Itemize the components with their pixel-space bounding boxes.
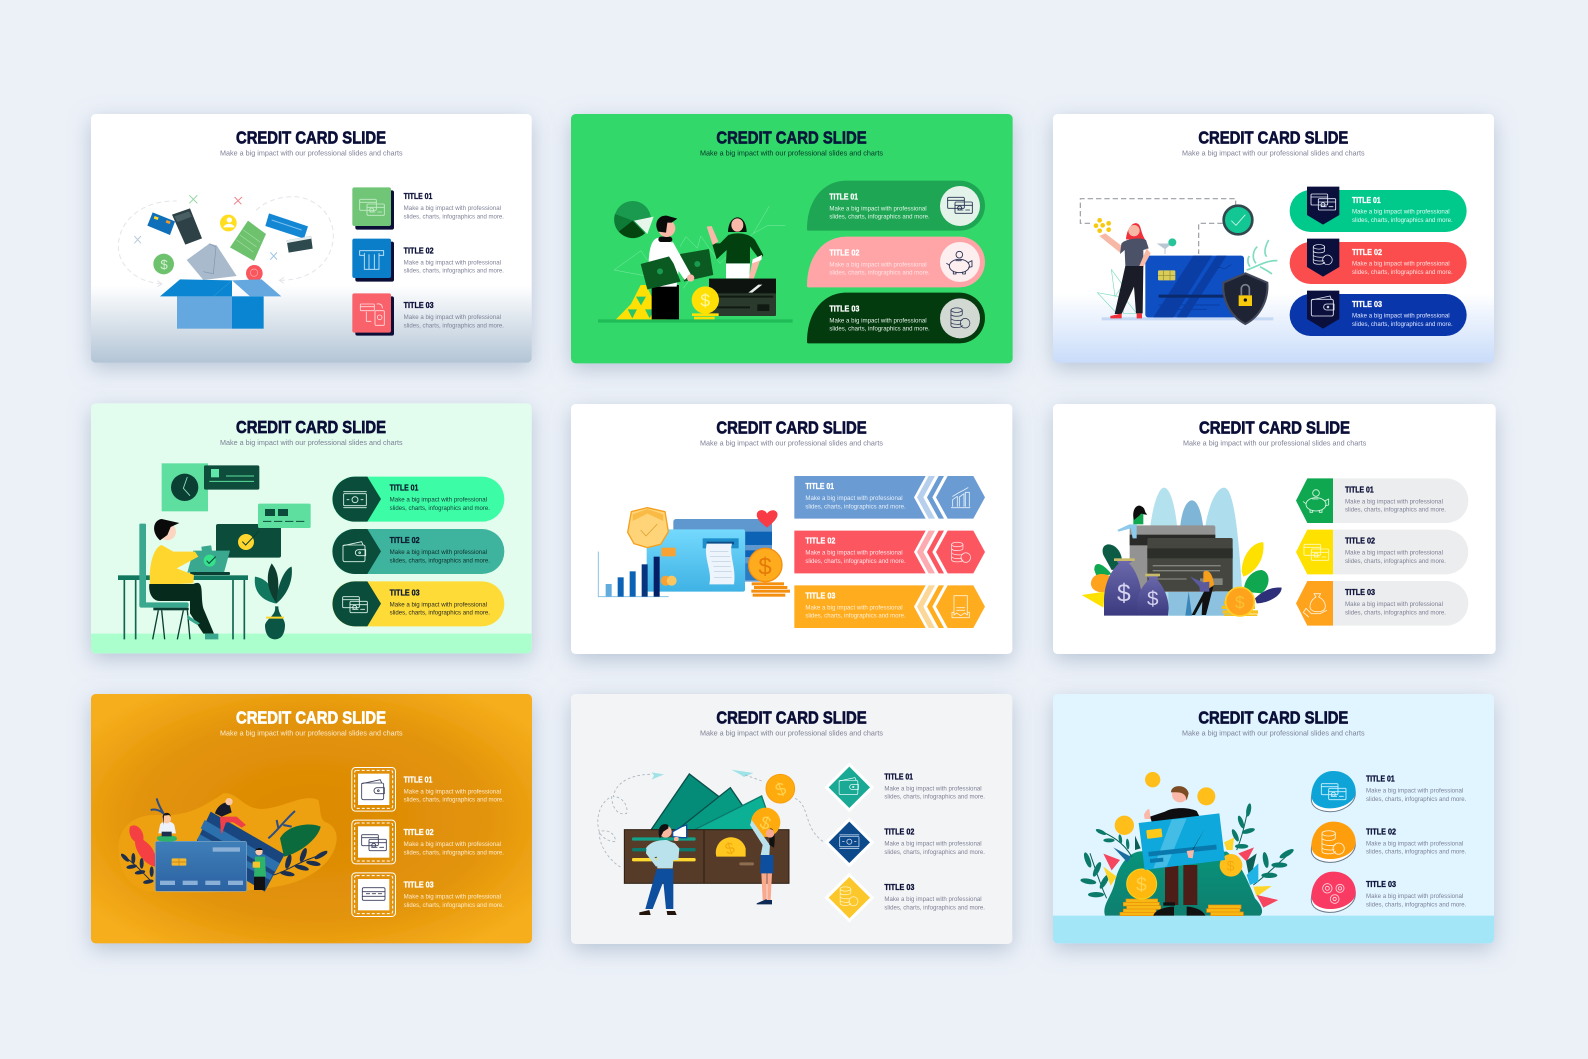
slide 4 title: CREDIT CARD SLIDE bbox=[236, 417, 386, 437]
slide 2 background bbox=[571, 114, 1013, 363]
item 3: text: slides, charts, infographics and more. bbox=[1366, 902, 1467, 908]
item 2: text: TITLE 02 bbox=[884, 828, 915, 837]
item 3: text: Make a big impact with professional bbox=[1366, 894, 1463, 900]
item 3: pill: TITLE 03 bbox=[829, 305, 860, 314]
illustration: woman, card, shield bbox=[1080, 199, 1277, 324]
item 3: pink blob icon bbox=[1311, 872, 1356, 912]
item 1: grey pill with green hexagon: slides, charts, infographics and more. bbox=[1345, 508, 1446, 514]
item 2: grey pill with yellow hexagon: TITLE 02 bbox=[1345, 537, 1375, 546]
slide 7: orange gradient with cards bbox=[91, 694, 532, 943]
illustration: open box with flying items: $ bbox=[160, 257, 168, 272]
item 2: navy diamond icon bbox=[824, 817, 874, 867]
item 2: text: Make a big impact with professional bbox=[404, 842, 501, 848]
item 1: text: TITLE 01 bbox=[884, 772, 913, 781]
item 2: text bbox=[404, 246, 504, 275]
slide 5 subtitle: Make a big impact with our professional slides and charts bbox=[700, 439, 883, 448]
item 3: orange arrow: TITLE 03 bbox=[805, 591, 836, 600]
item 2: text: TITLE 02 bbox=[404, 246, 434, 255]
item 3 icon bbox=[940, 298, 980, 338]
item 3 arrow with icon bbox=[332, 581, 381, 626]
item 1: text bbox=[884, 772, 985, 801]
item 1: green pill: TITLE 01 bbox=[1352, 196, 1381, 205]
item 1: green pill: Make a big impact with professional bbox=[1352, 210, 1450, 216]
slide 9 background bbox=[1053, 694, 1494, 943]
item 1: text bbox=[404, 192, 504, 220]
item 3 icon bbox=[952, 596, 969, 618]
slide 9 title: CREDIT CARD SLIDE bbox=[1198, 708, 1348, 728]
item 2: text: slides, charts, infographics and more. bbox=[884, 850, 985, 856]
item 2: text: slides, charts, infographics and more. bbox=[1366, 850, 1467, 856]
item 2: text: Make a big impact with professional bbox=[1366, 841, 1463, 847]
item 2: red pill: slides, charts, infographics and more. bbox=[1352, 270, 1453, 276]
slide 3: secure card with woman bbox=[1053, 114, 1494, 363]
item 1: blue arrow bbox=[794, 476, 985, 519]
illustration: card, receipt, bars and coin: $ bbox=[758, 553, 772, 580]
item 1: text bbox=[404, 775, 504, 804]
slide 2 title: CREDIT CARD SLIDE bbox=[716, 128, 867, 148]
item 3: red icon bbox=[352, 293, 394, 336]
item 2: text bbox=[884, 828, 985, 856]
item 3: pill bbox=[807, 293, 985, 343]
item 1: grey pill with green hexagon: Make a big impact with professional bbox=[1345, 499, 1443, 505]
illustration: wallet, banknotes, people bbox=[598, 770, 823, 915]
item 1: green pill: TITLE 01 bbox=[390, 484, 419, 493]
item 3: yellow diamond icon bbox=[824, 873, 874, 923]
item 3: blue pill bbox=[1290, 291, 1467, 336]
item 1: green pill: slides, charts, infographics and more. bbox=[1352, 218, 1453, 224]
slide 7 title: CREDIT CARD SLIDE bbox=[236, 708, 386, 728]
item 2: text bbox=[404, 828, 504, 856]
item 1: grey pill with green hexagon bbox=[1296, 478, 1468, 523]
item 3: text bbox=[884, 883, 985, 911]
item 1: text: Make a big impact with professional bbox=[404, 789, 501, 795]
item 2 badge bbox=[1307, 239, 1339, 277]
item 3: orange arrow bbox=[794, 585, 985, 628]
item 3: text bbox=[404, 881, 504, 909]
item 3: text: Make a big impact with professional bbox=[404, 315, 501, 321]
item 2: red arrow: TITLE 02 bbox=[805, 537, 836, 546]
slide 5 title: CREDIT CARD SLIDE bbox=[716, 418, 867, 438]
slide 3 subtitle: Make a big impact with our professional slides and charts bbox=[1182, 148, 1365, 157]
item 1: text: slides, charts, infographics and more. bbox=[1366, 797, 1467, 803]
item 3: text: slides, charts, infographics and more. bbox=[404, 903, 504, 909]
item 2 icon bbox=[952, 542, 971, 562]
item 3: yellow pill bbox=[332, 581, 504, 626]
illustration: cards, bags, people, leaves: $ bbox=[1117, 581, 1131, 608]
slide 5 background bbox=[571, 404, 1012, 654]
item 1: text: slides, charts, infographics and more. bbox=[884, 795, 985, 801]
item 2: text: Make a big impact with professional bbox=[884, 842, 982, 848]
item 2: blue icon bbox=[352, 239, 394, 282]
slide 5: white with chevron arrows bbox=[571, 404, 1012, 654]
item 2: red arrow: slides, charts, infographics and more. bbox=[805, 559, 906, 565]
item 2 arrow with icon bbox=[332, 529, 381, 574]
slide 2: green with two people bbox=[571, 114, 1013, 363]
item 2: text: slides, charts, infographics and more. bbox=[404, 850, 504, 856]
illustration: cards, bags, people, leaves bbox=[1082, 488, 1282, 616]
item 1 icon bbox=[940, 186, 980, 226]
item 2: pill: TITLE 02 bbox=[829, 249, 860, 258]
item 3: grey pill with orange hexagon: slides, charts, infographics and more. bbox=[1345, 610, 1446, 616]
item 1: text: slides, charts, infographics and more. bbox=[404, 798, 504, 804]
slide 4 background bbox=[91, 403, 532, 653]
slide 8: light grey with wallet bbox=[571, 694, 1012, 944]
slide 4: mint with man at desk bbox=[91, 403, 532, 653]
item 1 badge bbox=[1307, 187, 1339, 225]
item 3 badge bbox=[1307, 291, 1339, 329]
item 3: grey pill with orange hexagon: Make a big impact with professional bbox=[1345, 602, 1443, 608]
illustration: open box with flying items bbox=[118, 195, 333, 329]
slide 7 subtitle: Make a big impact with our professional slides and charts bbox=[220, 729, 403, 738]
item 3: orange arrow: slides, charts, infographics and more. bbox=[805, 614, 906, 620]
illustration: credit cards on blob with people bbox=[118, 793, 337, 893]
item 3: stitched icon bbox=[352, 873, 395, 916]
item 2: text: slides, charts, infographics and more. bbox=[404, 269, 504, 275]
illustration: man with giant card, coins and plants: $ bbox=[1227, 857, 1235, 873]
item 1: blue arrow: slides, charts, infographics and more. bbox=[805, 504, 906, 510]
slide 9 ground band bbox=[1053, 916, 1494, 943]
item 1: grey pill with green hexagon: TITLE 01 bbox=[1345, 485, 1374, 494]
item 3: text: TITLE 03 bbox=[1366, 880, 1396, 889]
item 3: grey pill with orange hexagon bbox=[1296, 581, 1468, 626]
item 2: grey pill with yellow hexagon bbox=[1296, 530, 1468, 574]
item 3: text: Make a big impact with professional bbox=[404, 895, 501, 901]
item 2: pill: slides, charts, infographics and more. bbox=[829, 271, 930, 277]
item 3: blue pill: Make a big impact with professional bbox=[1352, 314, 1450, 320]
item 1: pill: slides, charts, infographics and more. bbox=[829, 215, 930, 221]
item 1 arrow with icon bbox=[332, 477, 381, 522]
item 2: text: TITLE 02 bbox=[1366, 827, 1396, 836]
illustration: card, receipt, bars and coin bbox=[598, 508, 790, 597]
item 1: blue blob icon bbox=[1311, 771, 1356, 812]
item 3: orange arrow: Make a big impact with professional bbox=[805, 605, 903, 611]
item 2: teal pill: TITLE 02 bbox=[390, 536, 420, 545]
item 2: grey pill with yellow hexagon: slides, charts, infographics and more. bbox=[1345, 559, 1446, 565]
item 2: text: TITLE 02 bbox=[404, 828, 434, 837]
item 3: text: slides, charts, infographics and more. bbox=[404, 323, 504, 329]
illustration: people with money, gold and card bbox=[598, 201, 793, 323]
item 1: blue arrow: Make a big impact with professional bbox=[805, 496, 903, 502]
item 2: teal pill: slides, charts, infographics and more. bbox=[390, 558, 490, 564]
item 3: text bbox=[404, 301, 504, 329]
slide 6 background bbox=[1053, 404, 1496, 654]
item 2: text: Make a big impact with professional bbox=[404, 260, 501, 266]
item 2: pill: Make a big impact with professional bbox=[829, 262, 927, 268]
item 1: blue arrow: TITLE 01 bbox=[805, 482, 834, 491]
item 2: red pill: TITLE 02 bbox=[1352, 248, 1382, 257]
item 1: green pill: slides, charts, infographics and more. bbox=[390, 506, 490, 512]
item 2: pill bbox=[807, 237, 985, 287]
item 2: red arrow bbox=[794, 531, 985, 573]
item 1: text: TITLE 01 bbox=[404, 192, 433, 201]
slide 1: white with box illustration bbox=[91, 114, 532, 363]
item 2: grey pill with yellow hexagon: Make a big impact with professional bbox=[1345, 551, 1443, 557]
item 2: red arrow: Make a big impact with professional bbox=[805, 551, 903, 557]
item 3: text: slides, charts, infographics and more. bbox=[884, 905, 985, 911]
item 1 icon bbox=[1303, 490, 1329, 512]
item 3: blue pill: TITLE 03 bbox=[1352, 300, 1382, 309]
item 1: text: slides, charts, infographics and more. bbox=[404, 214, 504, 220]
item 1: stitched icon bbox=[352, 767, 395, 811]
item 1: text bbox=[1366, 775, 1467, 803]
item 3: pill: slides, charts, infographics and more. bbox=[829, 327, 930, 333]
item 1: pill: Make a big impact with professional bbox=[829, 206, 927, 212]
illustration: wallet, banknotes, people: $ bbox=[772, 778, 789, 800]
slide 8 background bbox=[571, 694, 1012, 944]
item 3: text: TITLE 03 bbox=[404, 301, 434, 310]
slide 3 background bbox=[1053, 114, 1494, 363]
item 1: green icon bbox=[352, 187, 394, 230]
item 2: text bbox=[1366, 827, 1467, 856]
item 1: teal diamond icon bbox=[824, 762, 874, 812]
illustration: man with giant card, coins and plants: $ bbox=[1136, 875, 1147, 896]
item 3: yellow pill: slides, charts, infographics and more. bbox=[390, 611, 490, 617]
illustration: wallet, banknotes, people: $ bbox=[757, 812, 774, 834]
item 1: text: Make a big impact with professional bbox=[1366, 789, 1463, 795]
slide 1 subtitle: Make a big impact with our professional slides and charts bbox=[220, 148, 403, 157]
item 3: blue pill: slides, charts, infographics and more. bbox=[1352, 322, 1453, 328]
item 2: teal pill bbox=[332, 529, 504, 574]
item 1 icon bbox=[951, 488, 970, 508]
item 3: text: TITLE 03 bbox=[404, 881, 434, 890]
slide 6 subtitle: Make a big impact with our professional slides and charts bbox=[1183, 439, 1367, 448]
illustration: man with giant card, coins and plants bbox=[1080, 772, 1295, 916]
item 1: text: Make a big impact with professional bbox=[404, 206, 501, 212]
illustration: man working at desk bbox=[118, 463, 311, 639]
item 1: green pill bbox=[332, 477, 504, 522]
illustration: wallet, banknotes, people: $ bbox=[723, 840, 737, 859]
item 1: pill bbox=[807, 181, 985, 231]
item 3: grey pill with orange hexagon: TITLE 03 bbox=[1345, 588, 1375, 597]
slide 1 background bbox=[91, 114, 532, 363]
slide 2 subtitle: Make a big impact with our professional slides and charts bbox=[700, 148, 883, 157]
illustration: cards, bags, people, leaves: $ bbox=[1147, 588, 1159, 611]
item 2: red pill: Make a big impact with professional bbox=[1352, 262, 1450, 268]
item 1: pill: TITLE 01 bbox=[829, 193, 858, 202]
slide 3 title: CREDIT CARD SLIDE bbox=[1198, 128, 1348, 148]
item 2: teal pill: Make a big impact with professional bbox=[390, 550, 487, 556]
item 2: red pill bbox=[1290, 239, 1467, 284]
item 3: text: Make a big impact with professional bbox=[884, 897, 982, 903]
slide 7 background bbox=[91, 694, 532, 943]
item 3 icon bbox=[1303, 594, 1327, 617]
item 3: yellow pill: Make a big impact with professional bbox=[390, 602, 487, 608]
illustration: cards, bags, people, leaves: $ bbox=[1235, 592, 1245, 612]
item 1: green pill: Make a big impact with professional bbox=[390, 498, 487, 504]
item 3: pill: Make a big impact with professional bbox=[829, 318, 927, 324]
item 2 icon bbox=[1304, 544, 1329, 560]
slide 9: light blue with man holding card bbox=[1053, 694, 1494, 943]
item 3: text bbox=[1366, 880, 1467, 908]
item 1: text: TITLE 01 bbox=[1366, 775, 1395, 784]
item 3: text: TITLE 03 bbox=[884, 883, 915, 892]
item 2 icon bbox=[940, 242, 980, 282]
illustration: people with money, gold and card: $ bbox=[700, 291, 710, 311]
slide 6 title: CREDIT CARD SLIDE bbox=[1199, 418, 1350, 438]
slide 6: white with money bags bbox=[1053, 404, 1496, 654]
slide 4 subtitle: Make a big impact with our professional slides and charts bbox=[220, 438, 403, 447]
item 1: green pill bbox=[1290, 187, 1467, 232]
item 1: text: TITLE 01 bbox=[404, 775, 433, 784]
slide 8 title: CREDIT CARD SLIDE bbox=[716, 708, 867, 728]
item 3: yellow pill: TITLE 03 bbox=[390, 588, 420, 597]
slide 8 subtitle: Make a big impact with our professional slides and charts bbox=[700, 729, 883, 738]
slide 1 title: CREDIT CARD SLIDE bbox=[236, 128, 386, 148]
item 2: stitched icon bbox=[352, 820, 395, 864]
slide 4 ground band bbox=[91, 634, 532, 653]
item 1: text: Make a big impact with professional bbox=[884, 786, 982, 792]
item 2: orange blob icon bbox=[1311, 822, 1356, 862]
slide 9 subtitle: Make a big impact with our professional slides and charts bbox=[1182, 729, 1365, 738]
